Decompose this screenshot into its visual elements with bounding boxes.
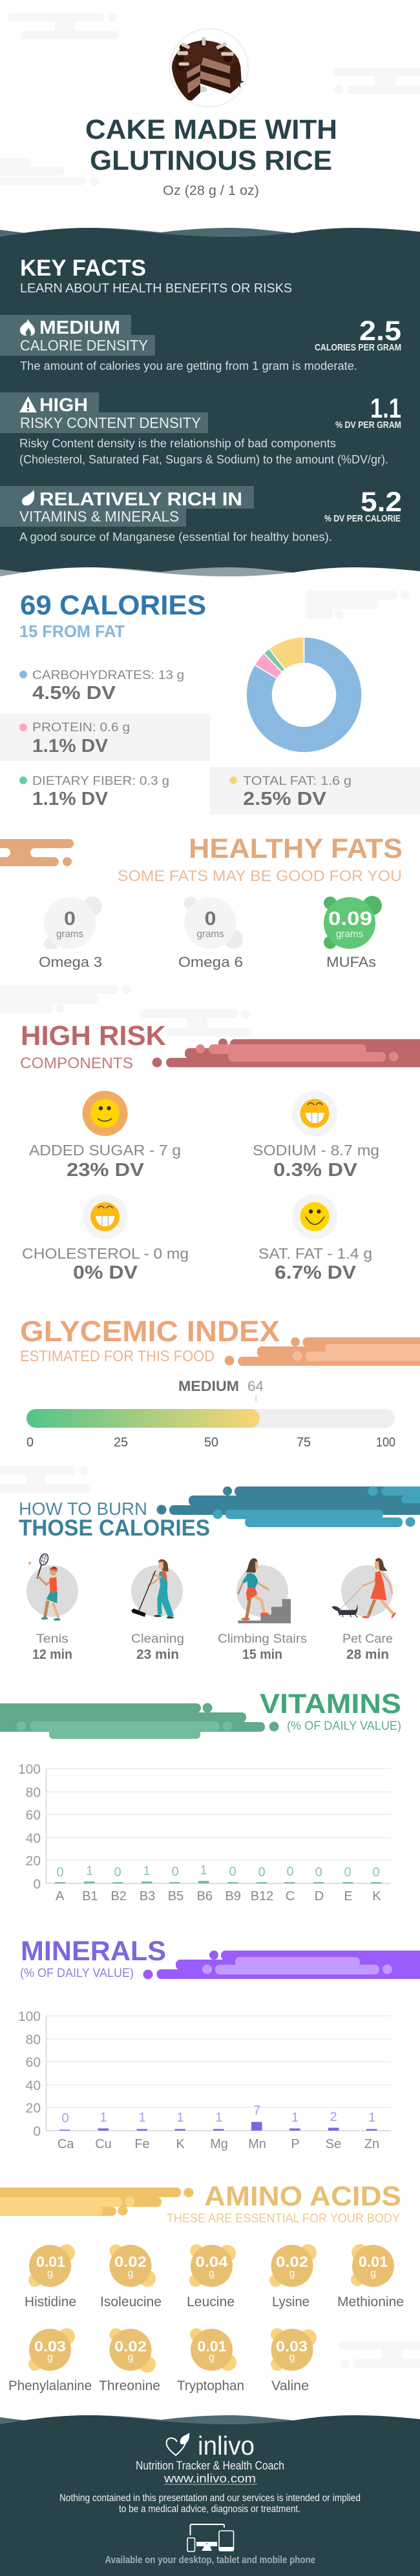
bar chart: vitamins: 20 [26, 1854, 41, 1869]
legend: total fat: 2.5% DV [243, 789, 327, 809]
gauge label [178, 1378, 264, 1401]
bar chart: vitamins: A [56, 1889, 65, 1903]
amino: valine: Valine [271, 2378, 309, 2393]
decorative banner: healthy fats [0, 839, 74, 866]
bar chart: vitamins: 1 [200, 1863, 207, 1878]
fact: vitamins and minerals: A good source of Manganese (essential for healthy bones). [19, 531, 332, 543]
legend: dietary fiber [19, 775, 169, 809]
bar chart: minerals: P [291, 2137, 300, 2151]
heading: amino acids: THESE ARE ESSENTIAL FOR YOUR BODY [167, 2212, 400, 2226]
legend: carbohydrates [19, 669, 184, 704]
amino: histidine: 0.01 [36, 2253, 65, 2270]
amino: methionine: 0.01 [359, 2253, 388, 2270]
panel: healthy fats [0, 833, 403, 970]
amino: lysine: g [289, 2268, 295, 2279]
bar chart: minerals: 1 [215, 2111, 222, 2125]
bar chart: minerals: Zn [364, 2137, 379, 2151]
heading: minerals: (% OF DAILY VALUE) [20, 1967, 134, 1980]
panel: vitamins [0, 1689, 401, 1903]
gauge bar: 0 [26, 1435, 34, 1450]
bar chart: minerals: Ca [58, 2137, 74, 2151]
logo: inlivo heart: inlivo [198, 2431, 255, 2460]
amino: isoleucine: Isoleucine [100, 2295, 162, 2309]
item: omega 3: Omega 3 [39, 954, 102, 970]
amino: tryptophan: 0.01 [198, 2338, 227, 2355]
heading: burn calories [19, 1499, 210, 1541]
heading: amino acids: AMINO ACIDS [204, 2181, 401, 2212]
fact: risky content density: RISKY CONTENT DENSITY [20, 414, 201, 431]
heading: amino acids [167, 2181, 401, 2226]
fact: calorie density [0, 315, 401, 372]
panel: amino acids [0, 2181, 404, 2393]
icon: cake photo in circle [170, 28, 248, 107]
fact: calorie density: MEDIUM [39, 318, 120, 338]
item: MUFAs: grams [336, 929, 363, 940]
heading: key facts: LEARN ABOUT HEALTH BENEFITS OR RISKS [20, 281, 292, 296]
bar chart: vitamins: B5 [168, 1889, 184, 1903]
legend: protein: 1.1% DV [32, 736, 109, 756]
legend: carbohydrates: 4.5% DV [32, 683, 116, 704]
item: cholesterol [22, 1194, 189, 1283]
panel: minerals [18, 1936, 420, 2151]
heading: vitamins: VITAMINS [260, 1689, 401, 1719]
bar chart: vitamins: 1 [143, 1864, 151, 1878]
item: cholesterol: CHOLESTEROL - 0 mg [22, 1245, 189, 1262]
bar chart: vitamins: 0 [372, 1865, 380, 1880]
panel: footer [0, 2415, 420, 2576]
bar chart: vitamins: B6 [197, 1889, 213, 1903]
heading: glycemic index [20, 1315, 280, 1365]
amino: threonine: 0.02 [114, 2338, 147, 2355]
item: cholesterol: 0% DV [73, 1263, 138, 1283]
icon: devices [187, 2524, 234, 2551]
activity: pet care: 28 min [346, 1647, 389, 1662]
panel: how to burn those calories [19, 1486, 420, 1662]
bar chart: minerals: 1 [138, 2111, 146, 2125]
fact: risky content density [0, 392, 401, 466]
heading: high risk: COMPONENTS [20, 1055, 133, 1072]
item: omega 3: 0 [64, 908, 76, 929]
gauge bar: 50 [204, 1435, 218, 1450]
amino: methionine: Methionine [337, 2295, 404, 2309]
amino: lysine: Lysine [272, 2295, 310, 2309]
item: omega 3 [39, 897, 102, 970]
legend: total fat [210, 767, 420, 815]
decorative banner: burn [156, 1486, 420, 1527]
heading: burn calories: HOW TO BURN [19, 1499, 147, 1519]
footer text: to be a medical advice, diagnosis or treatment. [119, 2504, 300, 2515]
bar chart: minerals: Fe [134, 2137, 150, 2151]
amino: tryptophan: Tryptophan [177, 2378, 244, 2393]
bar chart: minerals: 100 [18, 2009, 41, 2024]
decorative banner: high risk [152, 1039, 420, 1068]
bar chart: minerals: Se [326, 2137, 341, 2151]
legend: dietary fiber: DIETARY FIBER: 0.3 g [32, 775, 169, 788]
activity: cleaning: 23 min [136, 1647, 179, 1662]
activity: tennis: 12 min [32, 1647, 72, 1662]
heading: burn calories: THOSE CALORIES [19, 1516, 210, 1541]
bar chart: vitamins: B1 [82, 1889, 98, 1903]
gauge bar: 75 [297, 1435, 311, 1450]
fact: calorie density: The amount of calories you are getting from 1 gram is moderate. [20, 360, 357, 372]
bar chart: vitamins: 0 [229, 1865, 236, 1879]
amino: isoleucine: 0.02 [114, 2253, 147, 2270]
item: added sugar: 23% DV [67, 1160, 145, 1181]
item: added sugar [29, 1091, 181, 1181]
fact: risky content density: HIGH [39, 395, 88, 416]
amino: threonine: Threonine [99, 2378, 160, 2393]
amino: phenylalanine: g [47, 2352, 53, 2363]
availability note: Available on your desktop, tablet and mobile phone [105, 2555, 315, 2566]
gauge bar [26, 1409, 395, 1450]
bar chart: vitamins [18, 1762, 391, 1903]
bar chart: minerals: 0 [33, 2124, 41, 2139]
activity: climbing stairs: Climbing Stairs [218, 1632, 307, 1646]
bar chart: minerals: 1 [176, 2111, 184, 2125]
heading: glycemic index: ESTIMATED FOR THIS FOOD [20, 1348, 215, 1365]
bar chart: minerals: 60 [26, 2055, 41, 2070]
decorative banner: minerals [143, 1951, 420, 1979]
amino: phenylalanine [8, 2328, 92, 2393]
bar chart: minerals: 1 [291, 2111, 299, 2125]
bar chart: vitamins: 1 [86, 1864, 93, 1878]
footer text: Nutrition Tracker & Health Coach [136, 2459, 284, 2472]
fact: vitamins and minerals: 5.2 [361, 487, 402, 518]
heading: key facts: KEY FACTS [20, 256, 146, 281]
fact: calorie density: 2.5 [359, 316, 401, 347]
fact: risky content density: (Cholesterol, Saturated Fat, Sugars & Sodium) to the amount (%DV/gr). [19, 453, 388, 466]
item: saturated fat: 6.7% DV [275, 1263, 357, 1283]
activity: pet care [331, 1558, 396, 1662]
bar chart: vitamins: 100 [18, 1762, 41, 1777]
bar chart: vitamins: 60 [26, 1808, 41, 1823]
footer text: www.inlivo.com [163, 2472, 256, 2485]
title: GLUTINOUS RICE [90, 145, 332, 176]
fact: vitamins and minerals: % DV PER CALORIE [324, 514, 401, 524]
bar chart: vitamins: 0 [344, 1865, 352, 1880]
amino: isoleucine [100, 2244, 162, 2309]
gauge label: MEDIUM [178, 1378, 239, 1394]
bar chart: vitamins: 0 [171, 1865, 179, 1879]
bar chart: vitamins: B12 [251, 1889, 273, 1903]
legend: protein [0, 714, 210, 761]
fact: calorie density: CALORIES PER GRAM [315, 343, 401, 353]
activity: cleaning [131, 1559, 184, 1662]
bar chart: vitamins: 0 [258, 1865, 266, 1880]
amino: valine [271, 2328, 317, 2393]
amino: threonine: g [128, 2352, 133, 2363]
item: saturated fat: SAT. FAT - 1.4 g [258, 1245, 372, 1262]
item: omega 6: grams [196, 929, 224, 940]
activity: tennis [26, 1552, 78, 1662]
item: saturated fat [258, 1194, 372, 1283]
heading: healthy fats: HEALTHY FATS [189, 833, 403, 864]
bar chart: minerals: 7 [253, 2104, 260, 2118]
bar chart: vitamins: B9 [225, 1889, 241, 1903]
activity: cleaning: Cleaning [131, 1632, 184, 1646]
legend: dietary fiber: 1.1% DV [32, 789, 109, 809]
heading: calories: 69 CALORIES [20, 590, 206, 621]
amino: methionine: g [370, 2268, 376, 2279]
heading: glycemic index: GLYCEMIC INDEX [20, 1315, 280, 1348]
heading: key facts [20, 256, 292, 296]
amino: phenylalanine: Phenylalanine [8, 2378, 92, 2393]
amino: valine: 0.03 [276, 2338, 308, 2355]
title [85, 114, 337, 176]
item: omega 3: grams [56, 929, 83, 940]
activity: pet care: Pet Care [342, 1632, 393, 1646]
decorative banner: vitamins [0, 1703, 279, 1739]
bar chart: vitamins: B3 [140, 1889, 155, 1903]
serving size: Oz (28 g / 1 oz) [163, 183, 259, 198]
bar chart: minerals: Mg [210, 2137, 228, 2151]
amino: leucine: g [209, 2268, 215, 2279]
icon: warning triangle [19, 396, 37, 412]
item: MUFAs: 0.09 [328, 908, 372, 929]
footer text: Nothing contained in this presentation and our services is intended or implied [59, 2493, 361, 2504]
amino: tryptophan: g [209, 2352, 215, 2363]
fact: risky content density: % DV PER GRAM [335, 420, 401, 431]
bar chart: minerals [18, 2009, 391, 2151]
panel: high risk components [20, 1020, 420, 1283]
bar chart: vitamins: 0 [315, 1865, 322, 1880]
amino: lysine [269, 2244, 317, 2309]
heading: high risk [20, 1020, 166, 1072]
bar chart: vitamins: C [286, 1889, 295, 1903]
item: sodium: 0.3% DV [273, 1160, 358, 1181]
heading: minerals: MINERALS [21, 1936, 166, 1967]
legend: protein: PROTEIN: 0.6 g [32, 721, 130, 735]
decorative banner: amino acids [0, 2187, 194, 2216]
bar chart: minerals: 20 [26, 2101, 41, 2116]
bar chart: minerals: 80 [26, 2033, 41, 2047]
bar chart: vitamins: 0 [33, 1877, 41, 1892]
bar chart: vitamins: E [344, 1889, 353, 1903]
fact: vitamins and minerals: VITAMINS & MINERALS [19, 508, 179, 525]
heading: calories: 15 FROM FAT [19, 622, 125, 641]
heading: high risk: HIGH RISK [21, 1020, 166, 1051]
amino: valine: g [289, 2352, 295, 2363]
fact: vitamins and minerals: RELATIVELY RICH IN [39, 489, 242, 510]
fact: calorie density: CALORIE DENSITY [20, 337, 148, 354]
panel: glycemic index [20, 1315, 420, 1450]
item: omega 6 [178, 897, 243, 970]
amino: methionine [337, 2244, 404, 2309]
title: CAKE MADE WITH [85, 114, 337, 145]
bar chart: minerals: 0 [61, 2111, 69, 2125]
bar chart: vitamins: 0 [114, 1865, 121, 1880]
bar chart: minerals: 40 [26, 2078, 41, 2093]
heading: healthy fats: SOME FATS MAY BE GOOD FOR YOU [118, 867, 402, 885]
heading: healthy fats [118, 833, 403, 885]
heading: minerals [20, 1936, 166, 1980]
item: sodium [253, 1091, 379, 1181]
activity: climbing stairs [218, 1558, 307, 1662]
bar chart: vitamins: B2 [110, 1889, 127, 1903]
bar chart: vitamins: D [315, 1889, 324, 1903]
amino: leucine: 0.04 [195, 2253, 228, 2270]
item: added sugar: ADDED SUGAR - 7 g [29, 1142, 181, 1159]
bar chart: minerals: Mn [248, 2137, 266, 2151]
bar chart: minerals: 1 [100, 2111, 107, 2125]
item: omega 6: Omega 6 [178, 954, 243, 970]
activity: tennis: Tenis [36, 1632, 68, 1646]
amino: histidine: g [47, 2268, 53, 2279]
logo: inlivo heart [167, 2431, 255, 2460]
amino: leucine: Leucine [187, 2295, 235, 2309]
gauge bar: 100 [376, 1435, 395, 1450]
bar chart: vitamins: 80 [26, 1785, 41, 1800]
fact: risky content density: 1.1 [370, 393, 401, 424]
fact: vitamins and minerals [0, 486, 402, 543]
amino: tryptophan [177, 2328, 244, 2393]
heading: vitamins: (% OF DAILY VALUE) [287, 1719, 401, 1733]
gauge label: 64 [247, 1378, 264, 1394]
amino: histidine: Histidine [25, 2295, 76, 2309]
panel: key facts [0, 228, 420, 587]
amino: threonine [99, 2328, 160, 2393]
bar chart: vitamins: 0 [56, 1865, 64, 1880]
legend: total fat: TOTAL FAT: 1.6 g [243, 775, 352, 788]
icon: flame [20, 319, 35, 336]
item: MUFAs: MUFAs [326, 954, 376, 970]
heading: vitamins [260, 1689, 401, 1733]
bar chart: vitamins: 40 [26, 1831, 41, 1846]
amino: leucine [187, 2244, 236, 2309]
heading: calories [19, 590, 206, 641]
amino: lysine: 0.02 [276, 2253, 308, 2270]
fact: risky content density: Risky Content density is the relationship of bad components [19, 437, 336, 450]
item: omega 6: 0 [204, 908, 216, 929]
gauge bar: 25 [114, 1435, 128, 1450]
decorative banner: glycemic [225, 1337, 420, 1366]
bar chart: vitamins: K [372, 1889, 381, 1903]
bar chart: minerals: K [176, 2137, 185, 2151]
footer text [59, 2459, 361, 2515]
item: sodium: SODIUM - 8.7 mg [253, 1142, 379, 1159]
donut chart [246, 637, 362, 753]
amino: phenylalanine: 0.03 [34, 2338, 66, 2355]
amino: histidine [25, 2244, 76, 2309]
item: MUFAs [324, 896, 382, 970]
bar chart: vitamins: 0 [286, 1865, 294, 1879]
activity: climbing stairs: 15 min [242, 1647, 282, 1662]
amino: isoleucine: g [128, 2268, 133, 2279]
bar chart: minerals: 2 [330, 2110, 337, 2124]
icon: leaf [22, 490, 34, 505]
bar chart: minerals: Cu [95, 2137, 112, 2151]
legend: carbohydrates: CARBOHYDRATES: 13 g [32, 669, 184, 682]
bar chart: minerals: 1 [368, 2111, 375, 2125]
